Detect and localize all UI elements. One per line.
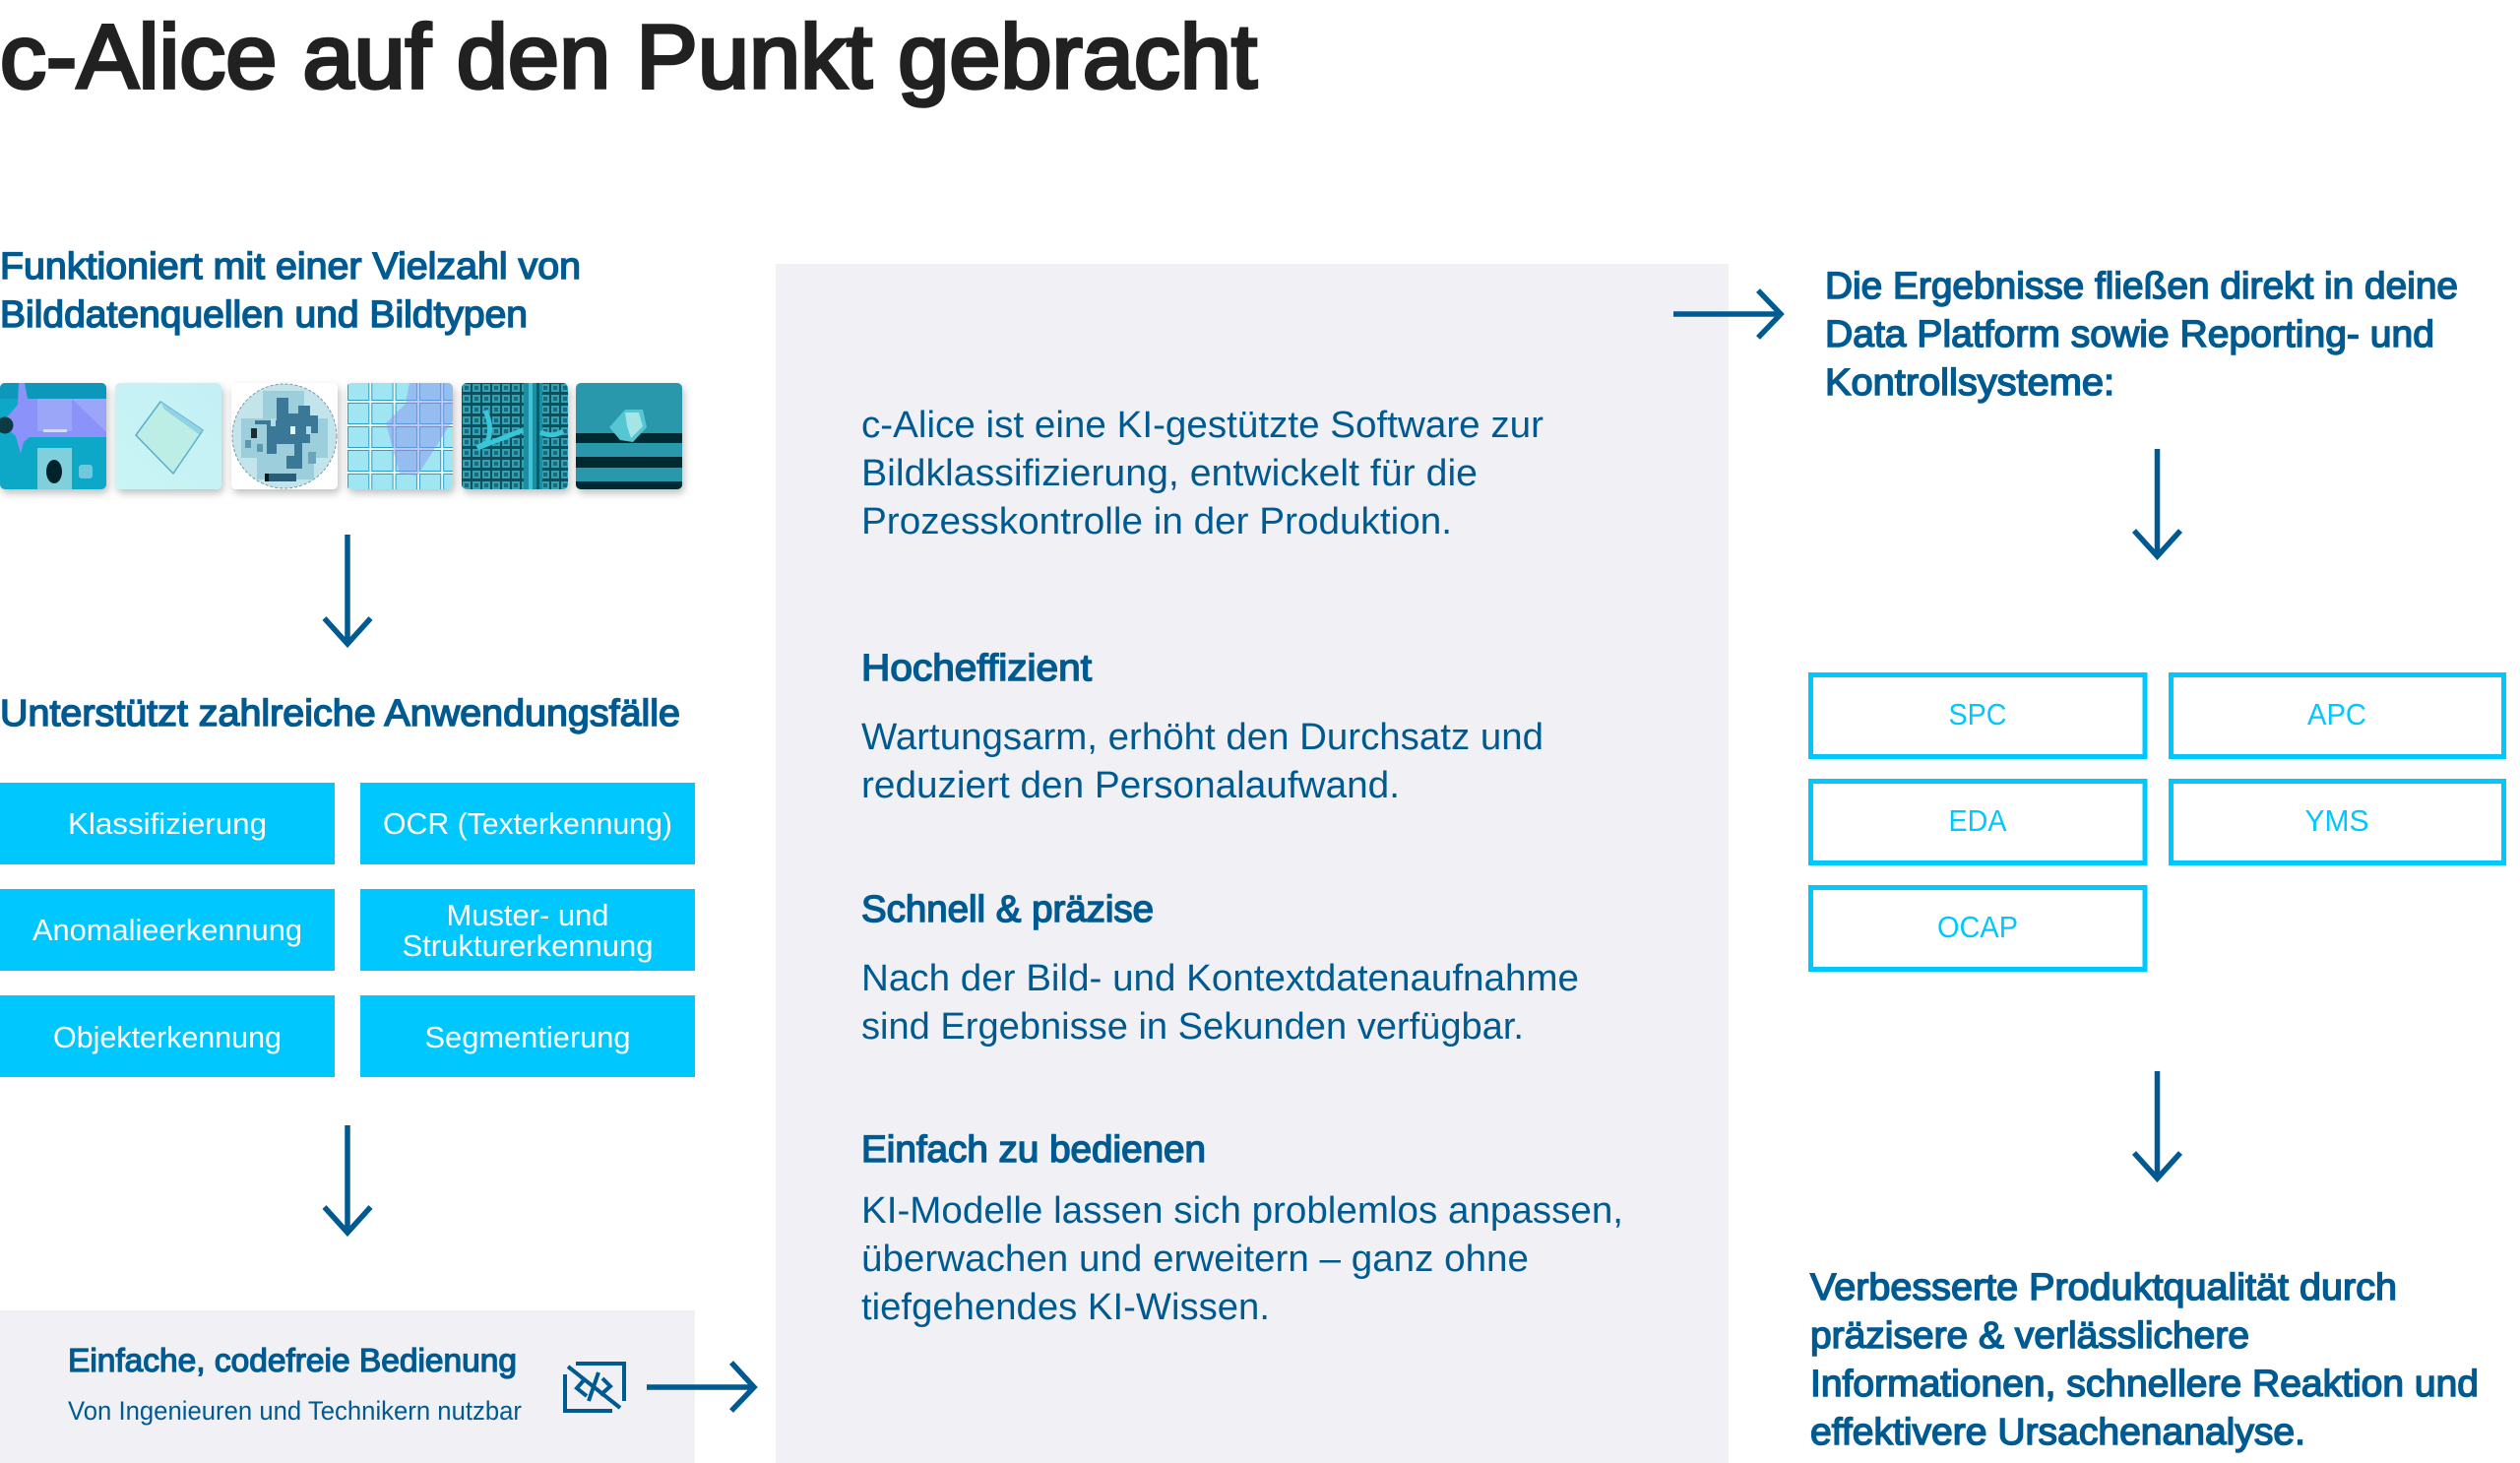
section: Hocheffizient: Wartungsarm, erhöht den Durchsatz und [861, 717, 1544, 758]
heading: results flow: Kontrollsysteme: [1825, 362, 2114, 404]
arrow: systems to outcome [2134, 1071, 2180, 1178]
box: OCAP [1811, 888, 2145, 969]
intro text: Prozesskontrolle in der Produktion. [861, 501, 1452, 542]
section: Schnell und praezise: sind Ergebnisse in Sekunden verfügbar. [861, 1006, 1524, 1048]
heading: results flow [1825, 266, 2458, 404]
intro text: c-Alice ist eine KI-gestützte Software zur [861, 405, 1544, 446]
thumbnail: crystal flake [115, 383, 221, 489]
title: c-Alice auf den Punkt gebracht [0, 7, 1257, 107]
thumbnail: circuit pattern [462, 383, 568, 489]
thumbnail: particle on lines [576, 383, 682, 489]
section: Einfach zu bedienen: KI-Modelle lassen sich problemlos anpassen, [861, 1190, 1623, 1232]
arrow: use cases to no-code panel [325, 1125, 370, 1233]
outcome statement: Verbesserte Produktqualität durch [1810, 1267, 2397, 1308]
box: OCAP: OCAP [1937, 910, 2018, 944]
heading: results flow: Die Ergebnisse fließen direkt in deine [1825, 266, 2458, 307]
section: Hocheffizient [861, 648, 1544, 806]
box: EDA: EDA [1949, 803, 2007, 838]
button: OCR [360, 783, 695, 864]
button: Klassifizierung [0, 783, 335, 864]
box: APC: APC [2307, 697, 2366, 732]
no-code subtext: Von Ingenieuren und Technikern nutzbar [68, 1396, 522, 1426]
section: Schnell und praezise [861, 889, 1579, 1048]
section: Schnell und praezise: Nach der Bild- und Kontextdatenaufnahme [861, 958, 1579, 999]
box: YMS: YMS [2305, 803, 2368, 838]
button: OCR: OCR (Texterkennung) [383, 806, 672, 841]
button: Objekterkennung: Objekterkennung [53, 1020, 282, 1054]
thumbnail: wafer map [231, 383, 338, 489]
section: Schnell und praezise: Schnell & präzise [861, 889, 1154, 930]
intro text [861, 405, 1544, 542]
section: Einfach zu bedienen: tiefgehendes KI-Wissen. [861, 1287, 1270, 1328]
heading: results flow: Data Platform sowie Reporting- und [1825, 314, 2434, 355]
heading: image sources [0, 246, 581, 336]
intro text: Bildklassifizierung, entwickelt für die [861, 453, 1478, 494]
outcome statement: Informationen, schnellere Reaktion und [1810, 1364, 2479, 1405]
box: YMS [2172, 782, 2504, 862]
arrow: results to systems [2134, 449, 2180, 556]
button: Muster- und Strukturerkennung: Strukturerkennung [402, 928, 654, 963]
thumbnail: chip layout [0, 383, 106, 489]
box: EDA [1811, 782, 2145, 862]
outcome statement: präzisere & verlässlichere [1810, 1315, 2249, 1357]
section: Einfach zu bedienen [861, 1129, 1623, 1328]
box: SPC [1811, 675, 2145, 756]
panel: center description [776, 264, 1729, 1463]
section: Hocheffizient: Hocheffizient [861, 648, 1092, 689]
outcome statement [1810, 1267, 2479, 1453]
no-code heading: Einfache, codefreie Bedienung [68, 1342, 517, 1378]
image thumbnails row [0, 383, 682, 489]
button: Klassifizierung: Klassifizierung [68, 806, 267, 841]
section: Einfach zu bedienen: Einfach zu bedienen [861, 1129, 1206, 1171]
button: Segmentierung: Segmentierung [425, 1020, 630, 1054]
arrow: images to use cases [325, 535, 370, 644]
panel: no-code operation [0, 1310, 695, 1463]
button: Objekterkennung [0, 995, 335, 1077]
box: SPC: SPC [1949, 697, 2006, 732]
use case buttons [0, 783, 695, 1077]
thumbnail: die grid [346, 383, 453, 489]
outcome statement: effektivere Ursachenanalyse. [1810, 1412, 2305, 1453]
heading: use cases: Unterstützt zahlreiche Anwendungsfälle [0, 693, 680, 734]
system boxes [1811, 675, 2504, 969]
heading: image sources: Bilddatenquellen und Bildtypen [0, 294, 528, 336]
box: APC [2172, 675, 2504, 756]
button: Segmentierung [360, 995, 695, 1077]
arrow: center to results [1673, 290, 1781, 338]
button: Muster- und Strukturerkennung [360, 889, 695, 971]
icon: no code [565, 1364, 624, 1411]
section: Einfach zu bedienen: überwachen und erweitern – ganz ohne [861, 1239, 1529, 1280]
section: Hocheffizient: reduziert den Personalaufwand. [861, 765, 1400, 806]
button: Anomalieerkennung: Anomalieerkennung [32, 913, 302, 947]
arrow: no-code panel to center [647, 1363, 754, 1411]
heading: image sources: Funktioniert mit einer Vielzahl von [0, 246, 581, 287]
button: Anomalieerkennung [0, 889, 335, 971]
button: Muster- und Strukturerkennung: Muster- und [447, 898, 608, 932]
